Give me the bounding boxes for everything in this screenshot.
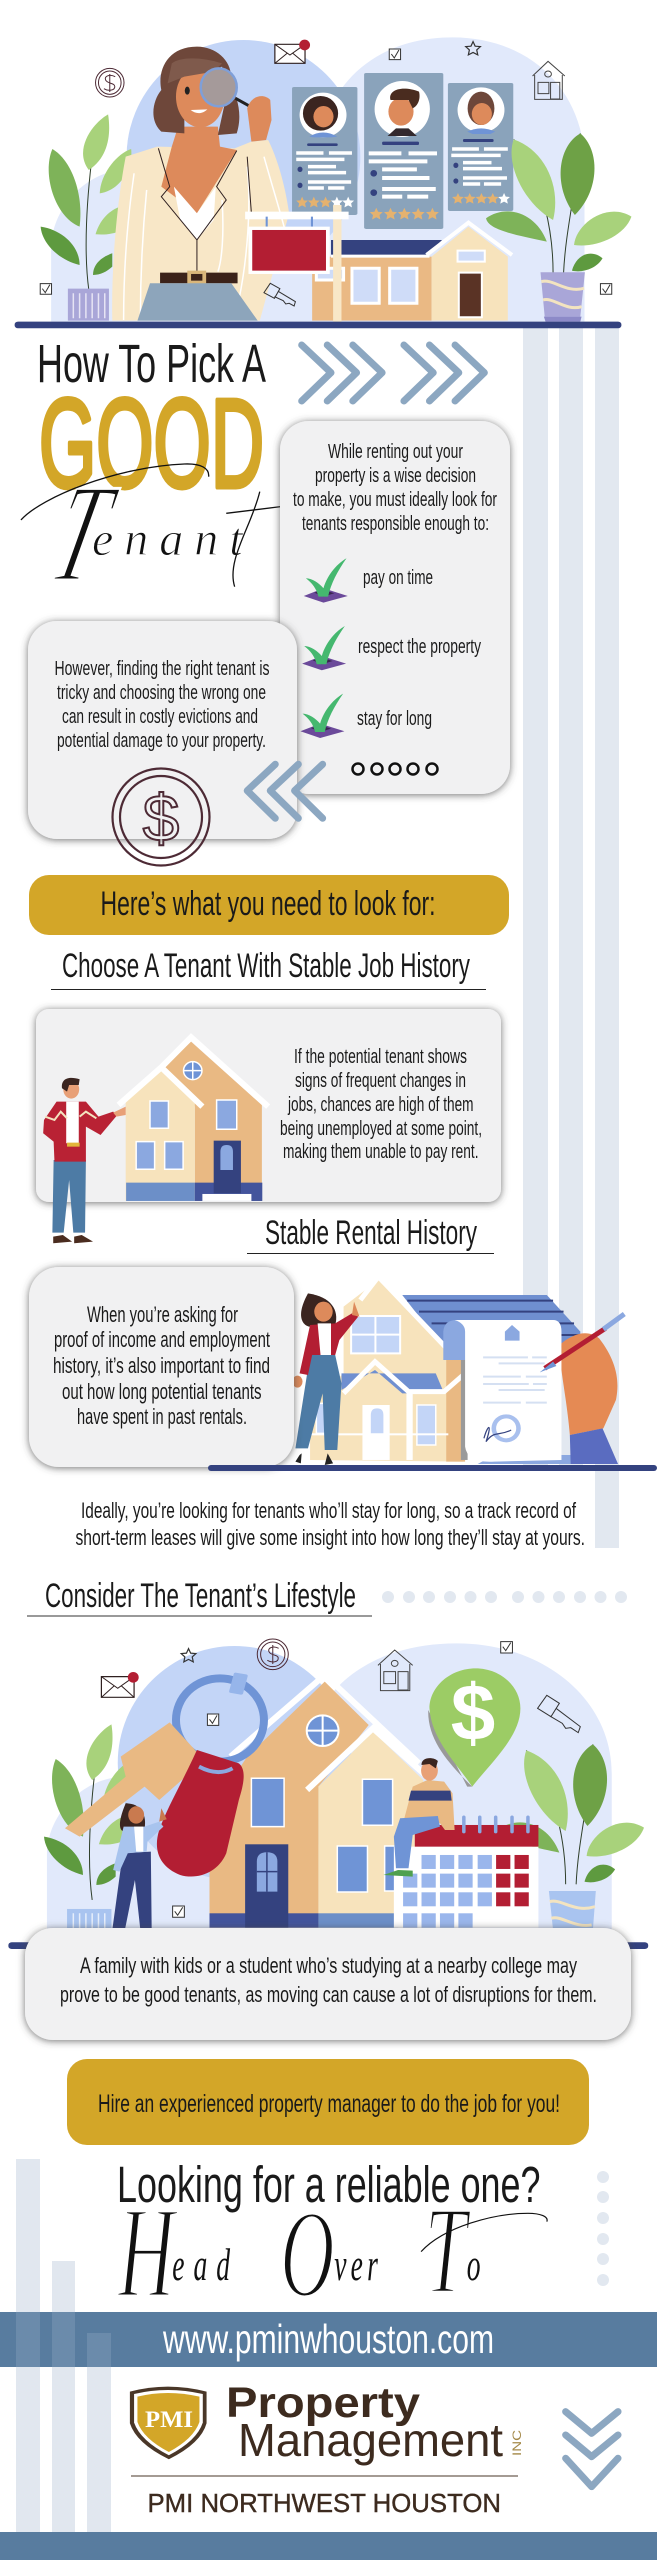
- base line under lease house: [208, 1465, 657, 1471]
- job history text: making them unable to pay rent.: [283, 1141, 478, 1163]
- bottom bar: [0, 2532, 657, 2560]
- chevrons pointing down: [566, 2412, 618, 2487]
- logo: company name: PMI NORTHWEST HOUSTON: [148, 2488, 501, 2518]
- base line: [8, 1942, 648, 1949]
- script: head over to: O: [280, 2186, 334, 2324]
- job history text: signs of frequent changes in: [295, 1070, 466, 1092]
- woman with magnifying glass: [112, 47, 289, 321]
- panel: job history card: [36, 1009, 501, 1202]
- illustration: two storey house: [119, 1037, 268, 1201]
- heading: stable rental history: Stable Rental History: [265, 1214, 477, 1252]
- envelope: [101, 1672, 139, 1697]
- script: head over to: T: [425, 2182, 471, 2320]
- panel: family text card: [25, 1928, 631, 2040]
- job history text: [280, 1046, 482, 1163]
- flourish on the script line: [421, 2213, 547, 2252]
- banner: what to look for: Here’s what you need to look for:: [100, 885, 436, 923]
- woman in red jacket: [292, 1293, 360, 1465]
- left pot: [68, 289, 109, 321]
- banner: what to look for: [29, 875, 509, 935]
- left pot: [67, 1909, 111, 1932]
- icon: envelope: [275, 40, 310, 63]
- icon: house outline: [533, 61, 565, 99]
- left plant: [41, 114, 131, 290]
- however text: However, finding the right tenant is: [54, 658, 270, 680]
- intro text: to make, you must ideally look for: [293, 489, 497, 511]
- woman with key: [112, 1803, 167, 1930]
- title: How To Pick A: How To Pick A: [37, 334, 266, 394]
- checklist labels: pay on time: [363, 567, 433, 589]
- however text: potential damage to your property.: [57, 730, 266, 752]
- dotted row: [382, 1591, 627, 1603]
- hero illustration: landlord inspecting tenant profiles: [15, 37, 631, 328]
- panel: however card: [28, 621, 297, 839]
- left plant: [44, 1724, 135, 1900]
- banner: hire a manager: [67, 2059, 589, 2145]
- dots column: [597, 2171, 609, 2286]
- right plant: [499, 1744, 644, 1884]
- logo: PMI shield: [130, 2387, 207, 2459]
- rental history text: history, it’s also important to find: [53, 1353, 270, 1378]
- icon: dollar coin large: $: [143, 781, 179, 855]
- job history text: If the potential tenant shows: [294, 1046, 467, 1068]
- title: Tenant script: T: [38, 455, 129, 611]
- right pot: [549, 1891, 596, 1930]
- icon: checkboxes: [40, 49, 612, 294]
- man sitting on calendar: [383, 1758, 455, 1877]
- icon: dollar sign in pin: $: [451, 1668, 495, 1757]
- decorative vertical stripes left: [16, 2159, 111, 2532]
- intro text: property is a wise decision: [315, 465, 476, 487]
- script: head over to: ver: [334, 2240, 382, 2291]
- checklist labels: stay for long: [357, 708, 432, 730]
- checkboxes: [173, 1642, 512, 1917]
- checklist labels: respect the property: [358, 636, 481, 658]
- lifestyle illustration: [8, 1639, 648, 1949]
- lease document: [443, 1320, 574, 1464]
- rental history text: proof of income and employment: [54, 1327, 270, 1352]
- intro text: [293, 441, 497, 535]
- icon: dollar coin large: [112, 768, 210, 866]
- logo: company name: INC: [510, 2430, 524, 2456]
- calendar: [394, 1817, 538, 1928]
- family text: [60, 1953, 597, 2007]
- heading: lifestyle: Consider The Tenant’s Lifestyle: [45, 1577, 356, 1615]
- rental history text: have spent in past rentals.: [77, 1404, 247, 1429]
- panel: renting intro card: [280, 421, 510, 794]
- job history text: jobs, chances are high of them: [287, 1094, 474, 1116]
- title: GOOD: GOOD: [39, 373, 264, 514]
- intro text: While renting out your: [328, 441, 463, 463]
- icon: star: [466, 42, 480, 55]
- title: Tenant script: enant: [92, 513, 254, 566]
- base line: [15, 322, 621, 328]
- illustration: house with lease and woman: [292, 1277, 624, 1465]
- logo: company name: [131, 2379, 524, 2518]
- coin: [257, 1639, 288, 1670]
- however text: [54, 658, 270, 752]
- logo: PMI shield: PMI: [145, 2407, 193, 2432]
- logo: company name: Management: [238, 2414, 503, 2466]
- text: ideally paragraph: [76, 1498, 585, 1550]
- key and ring: [65, 1672, 264, 1877]
- house: [312, 223, 512, 321]
- star: [181, 1649, 196, 1662]
- check icons: [300, 558, 348, 738]
- green dollar pin: [428, 1668, 520, 1787]
- illustration: man in red jacket: [43, 1078, 126, 1243]
- checklist labels: [357, 567, 481, 730]
- profile card 3: [448, 83, 513, 211]
- chevrons pointing right: [302, 345, 484, 401]
- profile card 2: [364, 73, 443, 229]
- profile card 1: [292, 87, 357, 215]
- right pot: [541, 272, 585, 322]
- five dots: [352, 764, 438, 774]
- title: Tenant script: [38, 455, 254, 611]
- right plant: [486, 133, 631, 273]
- icon: dollar coin: [96, 68, 124, 97]
- logo: company name: Property: [226, 2379, 420, 2427]
- panel: rental history card: [29, 1267, 294, 1467]
- website bar: [0, 2312, 657, 2367]
- script: head over to: o: [467, 2240, 481, 2291]
- key icon: [538, 1695, 580, 1733]
- hand with pen: [540, 1314, 624, 1464]
- script: head over to: ead: [172, 2240, 239, 2291]
- house outline icon: [378, 1650, 413, 1691]
- intro text: tenants responsible enough to:: [302, 513, 489, 535]
- rental history text: [53, 1302, 270, 1429]
- house: [210, 1675, 425, 1928]
- rental history text: out how long potential tenants: [62, 1379, 262, 1404]
- however text: tricky and choosing the wrong one: [57, 682, 266, 704]
- website url: www.pminwhouston.com: [162, 2316, 494, 2362]
- chevrons pointing left: [247, 764, 323, 818]
- job history text: being unemployed at some point,: [280, 1118, 482, 1140]
- icon: key: [264, 283, 295, 306]
- decorative vertical stripes right: [523, 328, 619, 1548]
- script: head over to: H: [117, 2181, 179, 2325]
- for rent sign: [245, 205, 349, 322]
- rental history text: When you’re asking for: [87, 1302, 238, 1327]
- flourish on the Tenant title: [21, 464, 281, 587]
- however text: can result in costly evictions and: [62, 706, 258, 728]
